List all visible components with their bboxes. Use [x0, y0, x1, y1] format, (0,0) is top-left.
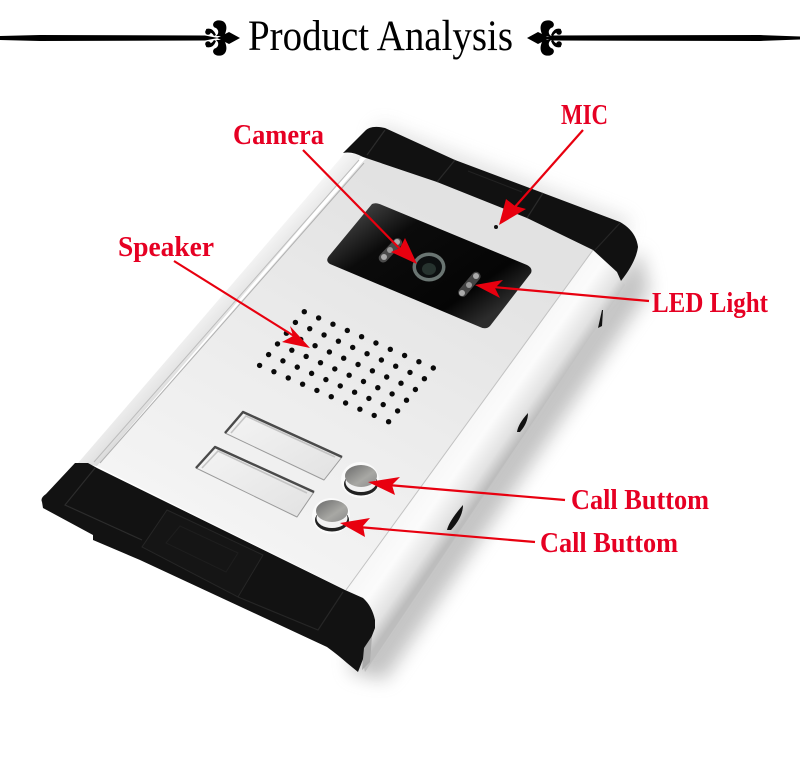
door station device — [42, 124, 650, 680]
name plate 2 — [196, 447, 314, 517]
right rule — [540, 35, 800, 41]
camera window — [327, 203, 532, 328]
right led strip — [456, 270, 482, 299]
arrow: call button upper — [368, 477, 565, 500]
label: LED Light: LED Light — [652, 287, 768, 319]
label: Camera: Camera — [233, 119, 324, 151]
call button 2 — [312, 498, 350, 534]
left led strip — [377, 236, 404, 264]
device top shadow — [370, 124, 630, 240]
label: Speaker: Speaker — [118, 231, 214, 263]
name plate 1 — [225, 412, 342, 480]
icon: mic hole — [494, 225, 498, 229]
top end cap — [343, 127, 638, 281]
label: MIC: MIC — [561, 99, 608, 131]
arrow: camera — [303, 150, 417, 264]
side connector — [362, 636, 372, 670]
title banner — [0, 13, 800, 60]
label: Call Buttom lower: Call Buttom — [540, 527, 678, 559]
device shadow — [350, 250, 650, 680]
arrow: speaker — [174, 261, 310, 348]
heading: Product Analysis — [248, 13, 513, 60]
label: Call Buttom upper: Call Buttom — [571, 484, 709, 516]
panel: front face — [97, 157, 593, 590]
face creases — [346, 250, 593, 590]
side slots — [447, 310, 603, 530]
arrow: led light — [475, 280, 649, 301]
arrow: call button lower — [340, 518, 535, 542]
panel: left side strip — [78, 153, 363, 466]
arrow: mic — [499, 130, 583, 225]
left rule — [0, 35, 218, 41]
speaker grille — [257, 309, 436, 424]
call button 1 — [341, 462, 379, 498]
bottom end cap — [42, 463, 375, 672]
icon: left fleur-de-lis — [205, 20, 240, 56]
camera lens — [412, 252, 446, 282]
icon: right fleur-de-lis — [527, 20, 562, 56]
panel: right side strip — [345, 250, 625, 672]
